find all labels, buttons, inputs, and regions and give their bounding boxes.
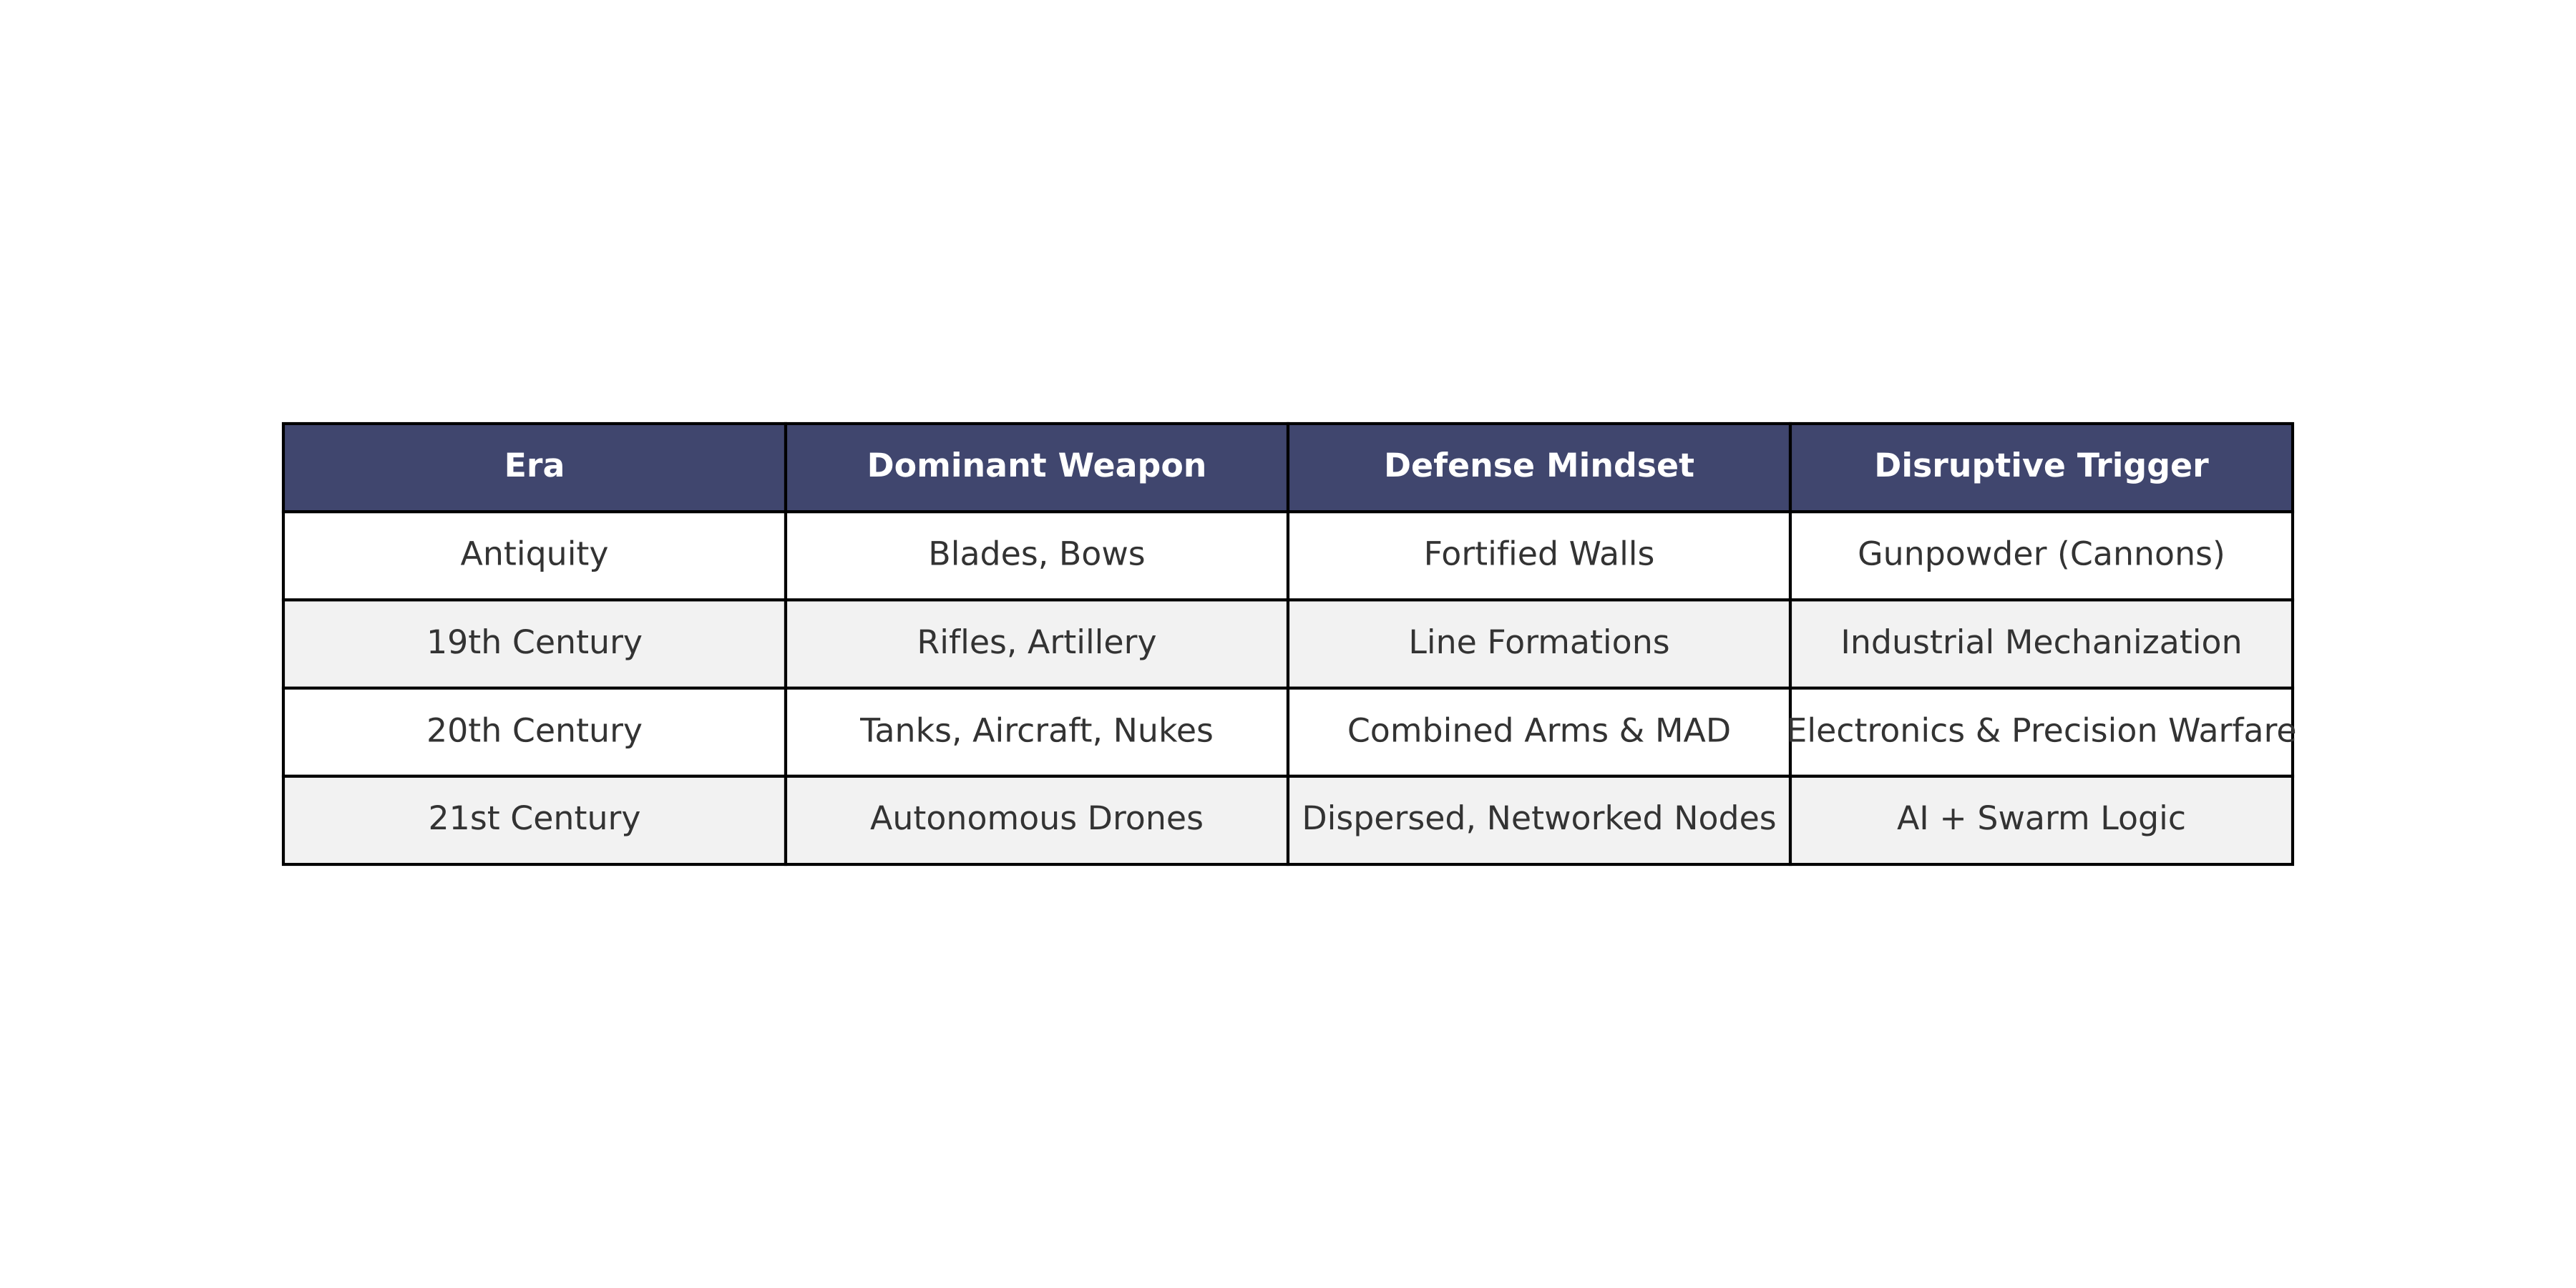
cell: Industrial Mechanization: Industrial Mechanization [1840,623,2243,661]
cell: AI + Swarm Logic [1790,776,2293,864]
cell: Fortified Walls: Fortified Walls [1424,534,1654,572]
cell: Industrial Mechanization [1790,600,2293,688]
cell: 19th Century: 19th Century [426,623,643,661]
cell: Blades, Bows: Blades, Bows [928,534,1146,572]
cell: Tanks, Aircraft, Nukes [786,688,1288,776]
cell: Antiquity: Antiquity [460,534,609,572]
header cell: Era [283,424,786,512]
cell: 21st Century [283,776,786,864]
cell: Combined Arms & MAD: Combined Arms & MAD [1347,711,1731,750]
cell: Blades, Bows [786,512,1288,600]
cell: Autonomous Drones: Autonomous Drones [870,799,1204,837]
header cell: Dominant Weapon [786,424,1288,512]
cell: Gunpowder (Cannons) [1790,512,2293,600]
row: 20th Century [283,688,2297,776]
cell: 21st Century: 21st Century [429,799,640,837]
row: Antiquity [283,512,2293,600]
table: eras of warfare [283,424,2297,864]
cell: AI + Swarm Logic: AI + Swarm Logic [1897,799,2186,837]
cell: Electronics & Precision Warfare [1786,688,2297,776]
header cell: Defense Mindset [1288,424,1790,512]
cell: Tanks, Aircraft, Nukes: Tanks, Aircraft, Nukes [859,711,1214,750]
cell: Dispersed, Networked Nodes: Dispersed, Networked Nodes [1302,799,1777,837]
header cell: Defense Mindset: Defense Mindset [1384,446,1694,484]
row: 21st Century [283,776,2293,864]
cell: Dispersed, Networked Nodes [1288,776,1790,864]
cell: 19th Century [283,600,786,688]
cell: Rifles, Artillery: Rifles, Artillery [917,623,1157,661]
cell: Combined Arms & MAD [1288,688,1790,776]
cell: Rifles, Artillery [786,600,1288,688]
header cell: Disruptive Trigger: Disruptive Trigger [1874,446,2209,484]
cell: 20th Century: 20th Century [426,711,643,750]
header cell: Disruptive Trigger [1790,424,2293,512]
cell: Line Formations: Line Formations [1408,623,1670,661]
header cell: Era: Era [504,446,565,484]
cell: 20th Century [283,688,786,776]
cell: Fortified Walls [1288,512,1790,600]
cell: Autonomous Drones [786,776,1288,864]
cell: Electronics & Precision Warfare: Electronics & Precision Warfare [1786,711,2297,750]
header cell: Dominant Weapon: Dominant Weapon [867,446,1206,484]
cell: Antiquity [283,512,786,600]
cell: Line Formations [1288,600,1790,688]
cell: Gunpowder (Cannons): Gunpowder (Cannons) [1858,534,2225,572]
row: 19th Century [283,600,2293,688]
header row [283,424,2293,512]
